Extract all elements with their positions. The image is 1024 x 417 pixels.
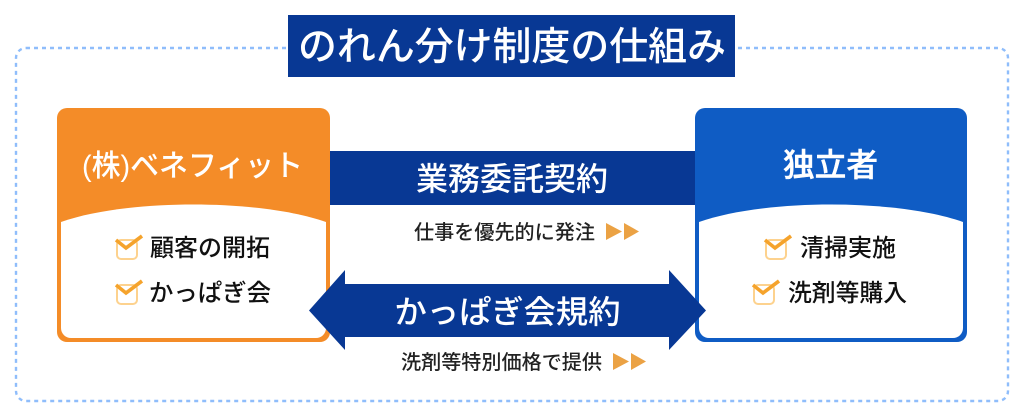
item: 清掃実施: 清掃実施 [800,235,896,262]
icon: double triangle [606,223,639,240]
title: のれん分け制度の仕組み [298,26,726,69]
panel: 独立者 [695,108,967,342]
title [288,15,735,77]
panel body: white area [61,204,326,338]
double-headed arrow: かっぱぎ会規約: かっぱぎ会規約 [394,294,620,330]
heading: 独立者: 独立者 [783,147,878,183]
note: 仕事を優先的に発注: 仕事を優先的に発注 [414,221,595,244]
double-headed arrow: かっぱぎ会規約 [309,270,706,350]
item: 顧客の開拓: 顧客の開拓 [150,235,270,262]
icon: double triangle [613,353,646,370]
panel: 株式会社ベネフィット [57,108,330,342]
contract band: 業務委託契約 [329,151,696,205]
contract band: 業務委託契約: 業務委託契約 [416,161,608,197]
heading: company name: (株)ベネフィット [82,150,303,183]
note: 洗剤等特別価格で提供: 洗剤等特別価格で提供 [401,351,602,374]
item: 洗剤等購入: 洗剤等購入 [788,280,907,307]
panel body: white area [699,204,963,338]
item: かっぱぎ会: かっぱぎ会 [149,280,271,307]
